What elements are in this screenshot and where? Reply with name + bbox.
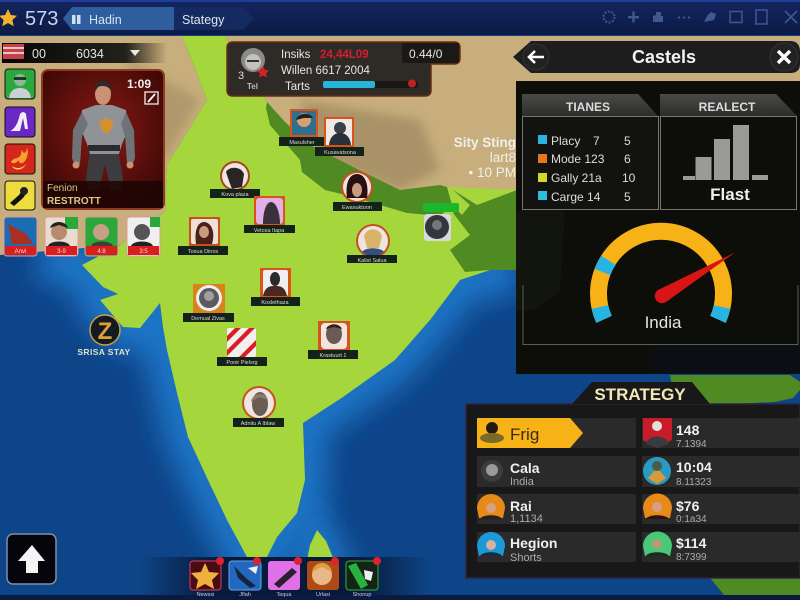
tab: Strategy <box>174 7 254 30</box>
icon: flag <box>3 44 24 59</box>
row: Hegion: Shorts <box>510 552 542 564</box>
marker J: Demual Zivas <box>191 316 225 322</box>
marker J <box>183 284 234 322</box>
legend row 1: Placy <box>551 134 580 148</box>
info panel: 3 <box>238 70 244 82</box>
sea marker logo: Z <box>98 318 112 345</box>
toolbar item: green: Shonup <box>353 592 371 598</box>
icon: leader portrait <box>241 48 269 78</box>
marker K: Krastuurt 1 <box>320 353 346 359</box>
hero figure <box>72 81 135 190</box>
flag resource bar <box>2 43 167 63</box>
unit card 3 <box>85 217 118 256</box>
row: $76: $76 <box>676 498 700 514</box>
selected row: Frig: Frig <box>510 425 539 444</box>
map markers <box>178 109 459 427</box>
legend row 1 <box>538 134 631 148</box>
sri lanka <box>307 530 334 560</box>
toolbar item: blue: Jflah <box>239 592 251 598</box>
legend row 4: 5 <box>624 190 631 204</box>
toolbar item: face <box>307 557 339 598</box>
info panel: 0.44/0 <box>409 47 443 61</box>
row: $76: 0:1a34 <box>676 514 707 525</box>
legend row 2 <box>538 152 631 166</box>
header bar <box>513 41 800 73</box>
left skill icons <box>5 69 35 210</box>
legend row 3: Gally 21a <box>551 171 602 185</box>
unit card 1 <box>4 217 37 256</box>
toolbar item: blue <box>229 557 261 598</box>
marker I <box>251 268 300 306</box>
unit card 3: 4:8 <box>97 249 106 255</box>
legend row 3: 10 <box>622 171 636 185</box>
bottom toolbar <box>0 557 800 600</box>
flag resource bar: 6034 <box>76 47 104 61</box>
bottom-right land <box>670 375 800 596</box>
unit card 2 <box>45 217 78 256</box>
unit cards row <box>4 217 160 256</box>
row: 148 <box>643 418 707 450</box>
marker A: Masulsher <box>289 140 315 146</box>
gauge label: India <box>645 313 682 332</box>
row: Rai: Rai <box>510 498 532 514</box>
hero caption <box>43 181 163 208</box>
unit card 4 <box>127 217 160 256</box>
row: $114 <box>643 532 707 563</box>
legend row 2: Mode 123 <box>551 152 605 166</box>
toolbar icons <box>604 10 797 24</box>
legend row 4: Carge 14 <box>551 190 601 204</box>
row: 148: 7.1394 <box>676 439 707 450</box>
marker A <box>279 109 326 146</box>
row: $114: $114 <box>676 535 707 551</box>
realect chart: REALECT <box>699 100 756 114</box>
hero caption: Fenion <box>47 183 78 194</box>
icon: star <box>0 9 17 26</box>
needle <box>655 252 735 303</box>
tan highlands <box>0 36 800 255</box>
legend row 1: 7 <box>593 134 600 148</box>
marker E <box>178 217 228 255</box>
icon: fire <box>5 144 35 174</box>
legend table: TIANES <box>566 100 610 114</box>
legend row 4 <box>538 190 631 204</box>
marker B: Kusavatsona <box>324 150 357 156</box>
marker M <box>233 386 284 427</box>
toolbar item: pink: Tequa <box>276 592 292 598</box>
timer: 1:09 <box>127 77 151 91</box>
marker K <box>308 321 358 359</box>
info panel: Tarts <box>285 81 310 93</box>
bar chart <box>683 125 768 180</box>
realect chart: Flast <box>710 185 750 204</box>
marker F: Ewasuktoon <box>342 205 372 211</box>
close button <box>770 43 798 71</box>
strategy title: STRATEGY <box>594 385 686 404</box>
icon: checkbox <box>145 92 158 104</box>
row: $76 <box>643 493 707 525</box>
hero card <box>42 70 164 209</box>
legend row 2: 6 <box>624 152 631 166</box>
row: Cala: Cala <box>510 460 540 476</box>
row: Hegion: Hegion <box>510 535 557 551</box>
icon: green soldier <box>5 69 35 99</box>
sea marker logo <box>77 315 131 357</box>
toolbar item: star: Newssi <box>197 592 214 598</box>
legend row 3 <box>538 171 636 185</box>
row: Cala: India <box>510 476 535 488</box>
hero caption: RESTROTT <box>47 196 101 207</box>
marker C: Kova plaza <box>221 192 250 198</box>
marker M: Adnitu A Iblaw <box>241 421 275 427</box>
marker D <box>244 196 295 234</box>
info panel <box>227 42 460 96</box>
top bar <box>0 0 800 35</box>
marker L: striped <box>217 328 267 366</box>
row: Hegion <box>477 532 557 564</box>
row: Rai: 1,1134 <box>510 513 543 525</box>
row: 10:04 <box>643 457 712 488</box>
city label <box>454 135 516 180</box>
realect chart <box>660 94 797 210</box>
info panel: Tel <box>247 82 258 91</box>
score: 573 <box>25 8 58 30</box>
dark green forest band <box>266 102 452 216</box>
tab: Strategy: Stategy <box>182 13 225 27</box>
row: Rai <box>477 494 543 525</box>
marker H: Kalist Salua <box>357 258 387 264</box>
unit card 2: 3-9 <box>57 249 66 255</box>
row: 148: 148 <box>676 422 700 438</box>
gauge <box>598 231 735 332</box>
gauge frame <box>523 285 798 344</box>
row: Cala <box>481 460 540 488</box>
tab: Hadin <box>63 7 174 30</box>
flag resource bar: 00 <box>32 47 46 61</box>
legend table <box>522 94 658 210</box>
marker L: striped: Pooir Pielsrg <box>226 360 258 366</box>
panel: strategy <box>466 382 800 578</box>
marker H <box>347 224 397 264</box>
marker E: Tosua Dinos <box>188 249 218 255</box>
city label: • 10 PM <box>468 165 516 180</box>
back button <box>523 44 549 70</box>
up arrow button <box>7 534 56 584</box>
unit card 4: 3:5 <box>139 249 148 255</box>
icon: yellow tool <box>5 181 35 210</box>
icon: purple letter <box>5 107 35 137</box>
toolbar item: pink <box>268 557 302 598</box>
city label: Sity Sting <box>454 135 516 150</box>
info panel: 24,44L09 <box>320 49 369 61</box>
marker D: Vetosa Itapa <box>254 228 285 234</box>
marker G <box>423 203 459 241</box>
marker B <box>315 117 364 156</box>
toolbar item: star <box>190 557 224 598</box>
marker C <box>210 161 260 198</box>
info panel: Willen 6617 2004 <box>281 65 370 77</box>
row: $114: 8:7399 <box>676 552 707 563</box>
unit card 1: Anvi <box>15 249 26 255</box>
strategy title <box>572 382 710 404</box>
row: 10:04: 10:04 <box>676 459 712 475</box>
bright green land <box>82 36 517 557</box>
marker F <box>333 171 382 211</box>
info panel: Insiks <box>281 49 311 61</box>
panel title: Castels <box>632 47 696 67</box>
row: 10:04: 8.11323 <box>676 477 712 488</box>
toolbar item: green <box>346 557 381 598</box>
sea marker logo: SRISA STAY <box>77 347 131 357</box>
legend row 1: 5 <box>624 134 631 148</box>
marker I: Koslethaza <box>261 300 290 306</box>
panel: castels <box>513 41 800 374</box>
tab: Hadin: Hadin <box>89 13 122 27</box>
city label: lart8 <box>490 150 516 165</box>
progress bar <box>323 80 418 88</box>
selected row: Frig <box>477 418 583 448</box>
toolbar item: face: Urlasi <box>316 592 330 598</box>
